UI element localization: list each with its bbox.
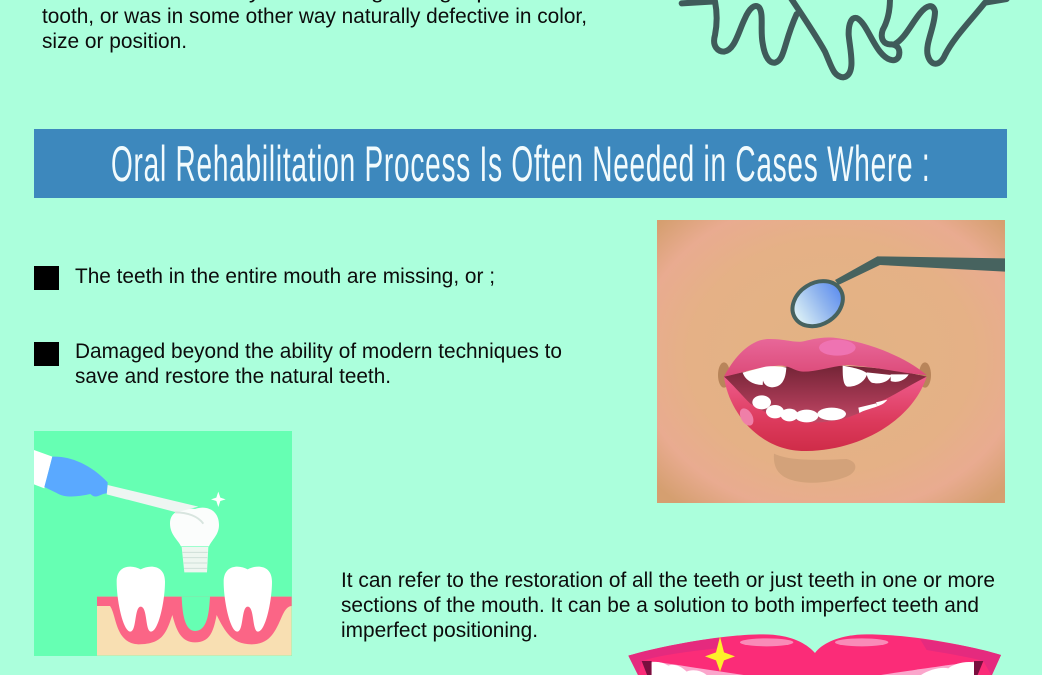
gum and bone xyxy=(97,597,292,656)
bullet item: missing teeth: The teeth in the entire mouth are missing, or ; xyxy=(75,265,495,288)
icon: implant xyxy=(170,508,219,572)
icon: natural teeth xyxy=(117,567,272,632)
illustration: mouth with missing teeth and dental mirror xyxy=(657,220,1005,503)
upper teeth xyxy=(743,366,909,422)
intro text block: tooth, or was in some other way naturally defective in color, xyxy=(42,5,587,28)
banner heading: Oral Rehabilitation Process Is Often Needed in Cases Where : xyxy=(111,135,930,192)
icon: tooth outline illustration xyxy=(682,0,1007,77)
bullet item: damaged teeth xyxy=(34,340,562,388)
banner heading xyxy=(34,129,1007,198)
text block: restoration description: imperfect positioning. xyxy=(341,619,538,642)
illustration: dental implant xyxy=(34,431,292,656)
icon: lips xyxy=(718,337,931,451)
icon: gloved hand and tweezers xyxy=(34,450,226,524)
text block: restoration description: sections of the mouth. It can be a solution to both imperfect teeth and xyxy=(341,594,979,617)
text block: restoration description: It can refer to the restoration of all the teeth or just teeth in one or more xyxy=(341,569,995,592)
bullet item: damaged teeth: save and restore the natural teeth. xyxy=(75,365,391,388)
intro text block: size or position. xyxy=(42,30,187,53)
icon: yellow sparkle xyxy=(705,637,735,672)
lower teeth xyxy=(752,395,771,409)
bullet item: damaged teeth: Damaged beyond the ability of modern techniques to xyxy=(75,340,562,363)
text block: restoration description xyxy=(341,569,995,642)
bullet list xyxy=(34,265,562,388)
icon: dental mirror xyxy=(784,256,1005,335)
intro text block xyxy=(42,0,587,53)
illustration: smiling lips xyxy=(628,634,1001,675)
